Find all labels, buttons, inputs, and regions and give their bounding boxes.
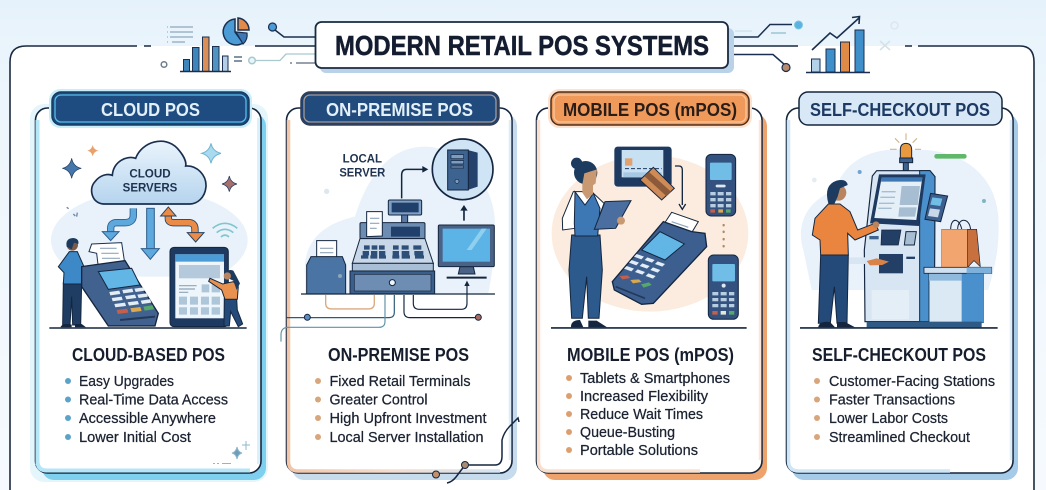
kiosk	[849, 171, 935, 322]
ground line	[551, 325, 747, 330]
feature list: cloud: Easy Upgrades	[79, 373, 174, 390]
feature list: cloud	[65, 373, 228, 446]
circuit trace	[432, 418, 519, 483]
panel: self-checkout POS	[786, 92, 1018, 480]
tablet with card	[614, 147, 674, 200]
label: local server	[339, 152, 386, 180]
cloud: CLOUD	[129, 166, 171, 180]
tab: mobile POS: MOBILE POS (mPOS)	[563, 100, 737, 120]
illustration: cloud servers and terminals	[49, 141, 250, 330]
feature list: self-checkout: Streamlined Checkout	[829, 429, 971, 446]
connecting dots	[720, 225, 727, 246]
label: local server: SERVER	[339, 166, 386, 180]
feature list: mobile: Reduce Wait Times	[580, 406, 703, 423]
arrows to server	[402, 166, 468, 221]
feature list: on-premise: High Upfront Investment	[330, 410, 487, 427]
right header decoration: growth chart and connectors	[728, 16, 898, 72]
feature list: mobile: Queue-Busting	[580, 424, 675, 441]
tablet	[170, 247, 228, 327]
feature list: self-checkout: Lower Labor Costs	[829, 410, 948, 427]
cloud: SERVERS	[123, 181, 177, 195]
card reader	[925, 193, 948, 222]
panel: on-premise POS	[281, 92, 519, 483]
base and ground line	[800, 322, 998, 328]
feature list: mobile: Portable Solutions	[580, 442, 698, 459]
feature list: mobile: Increased Flexibility	[580, 388, 708, 405]
ground line	[301, 292, 495, 296]
card frame	[786, 108, 1018, 480]
card frame	[536, 108, 767, 480]
cash register	[350, 200, 435, 294]
person at terminal	[58, 238, 96, 327]
illustration: self-checkout kiosk	[800, 133, 999, 328]
status bar	[934, 154, 967, 159]
panel: cloud POS	[30, 89, 268, 482]
feature list: on-premise: Greater Control	[330, 392, 428, 408]
tab: cloud POS	[49, 89, 252, 128]
heading: on-premise POS: ON-PREMISE POS	[328, 345, 469, 365]
ground line	[49, 326, 247, 330]
panel: mobile POS	[536, 89, 767, 480]
title banner: MODERN RETAIL POS SYSTEMS	[335, 30, 709, 61]
heading: cloud-based POS: CLOUD-BASED POS	[72, 345, 225, 365]
title banner	[316, 22, 734, 73]
corner accent	[966, 463, 994, 465]
feature list: cloud: Real-Time Data Access	[79, 392, 228, 408]
customer	[812, 180, 879, 327]
arrow	[675, 166, 686, 209]
icon: server	[432, 139, 493, 200]
feature list: self-checkout: Faster Transactions	[829, 392, 955, 408]
tab: on-premise POS	[301, 92, 499, 125]
feature list: on-premise: Local Server Installation	[330, 429, 484, 446]
staff member with tablet	[562, 158, 631, 327]
illustration: local server and register	[281, 139, 495, 342]
printer	[307, 241, 346, 294]
feature list: cloud: Lower Initial Cost	[79, 429, 192, 446]
card frame	[30, 104, 268, 482]
feature list: cloud: Accessible Anywhere	[79, 410, 216, 427]
corner sparkles	[213, 441, 250, 464]
handheld device top	[706, 154, 736, 216]
payment terminal with receipt	[82, 243, 158, 326]
shopping bag on counter	[942, 220, 980, 267]
wiring	[281, 281, 481, 342]
beacon light	[890, 133, 921, 171]
tab: cloud POS: CLOUD POS	[101, 100, 200, 120]
large card terminal	[612, 212, 707, 304]
feature list: self-checkout: Customer-Facing Stations	[829, 373, 995, 390]
illustration: mobile devices and staff member	[551, 147, 748, 328]
tab: mobile POS	[548, 89, 752, 128]
heading: self-checkout POS: SELF-CHECKOUT POS	[812, 345, 986, 365]
handheld device bottom	[708, 255, 738, 319]
person at tablet	[209, 270, 243, 327]
monitor	[438, 225, 494, 278]
feature list: self-checkout	[814, 373, 995, 446]
tab: self-checkout POS: SELF-CHECKOUT POS	[810, 100, 990, 120]
left header decoration: charts and connectors	[161, 18, 315, 72]
card frame	[286, 108, 517, 480]
cloud	[92, 141, 206, 204]
arrows	[102, 207, 204, 259]
label: local server: LOCAL	[343, 152, 382, 166]
feature list: mobile	[566, 370, 730, 459]
counter	[924, 267, 992, 323]
heading: mobile POS: MOBILE POS (mPOS)	[567, 345, 734, 365]
feature list: on-premise	[315, 373, 487, 446]
sparkles	[62, 143, 237, 217]
icon: wifi	[213, 223, 237, 237]
tab: self-checkout POS	[799, 92, 1002, 125]
tab: on-premise POS: ON-PREMISE POS	[326, 100, 473, 120]
feature list: on-premise: Fixed Retail Terminals	[330, 373, 470, 390]
feature list: mobile: Tablets & Smartphones	[580, 370, 730, 387]
